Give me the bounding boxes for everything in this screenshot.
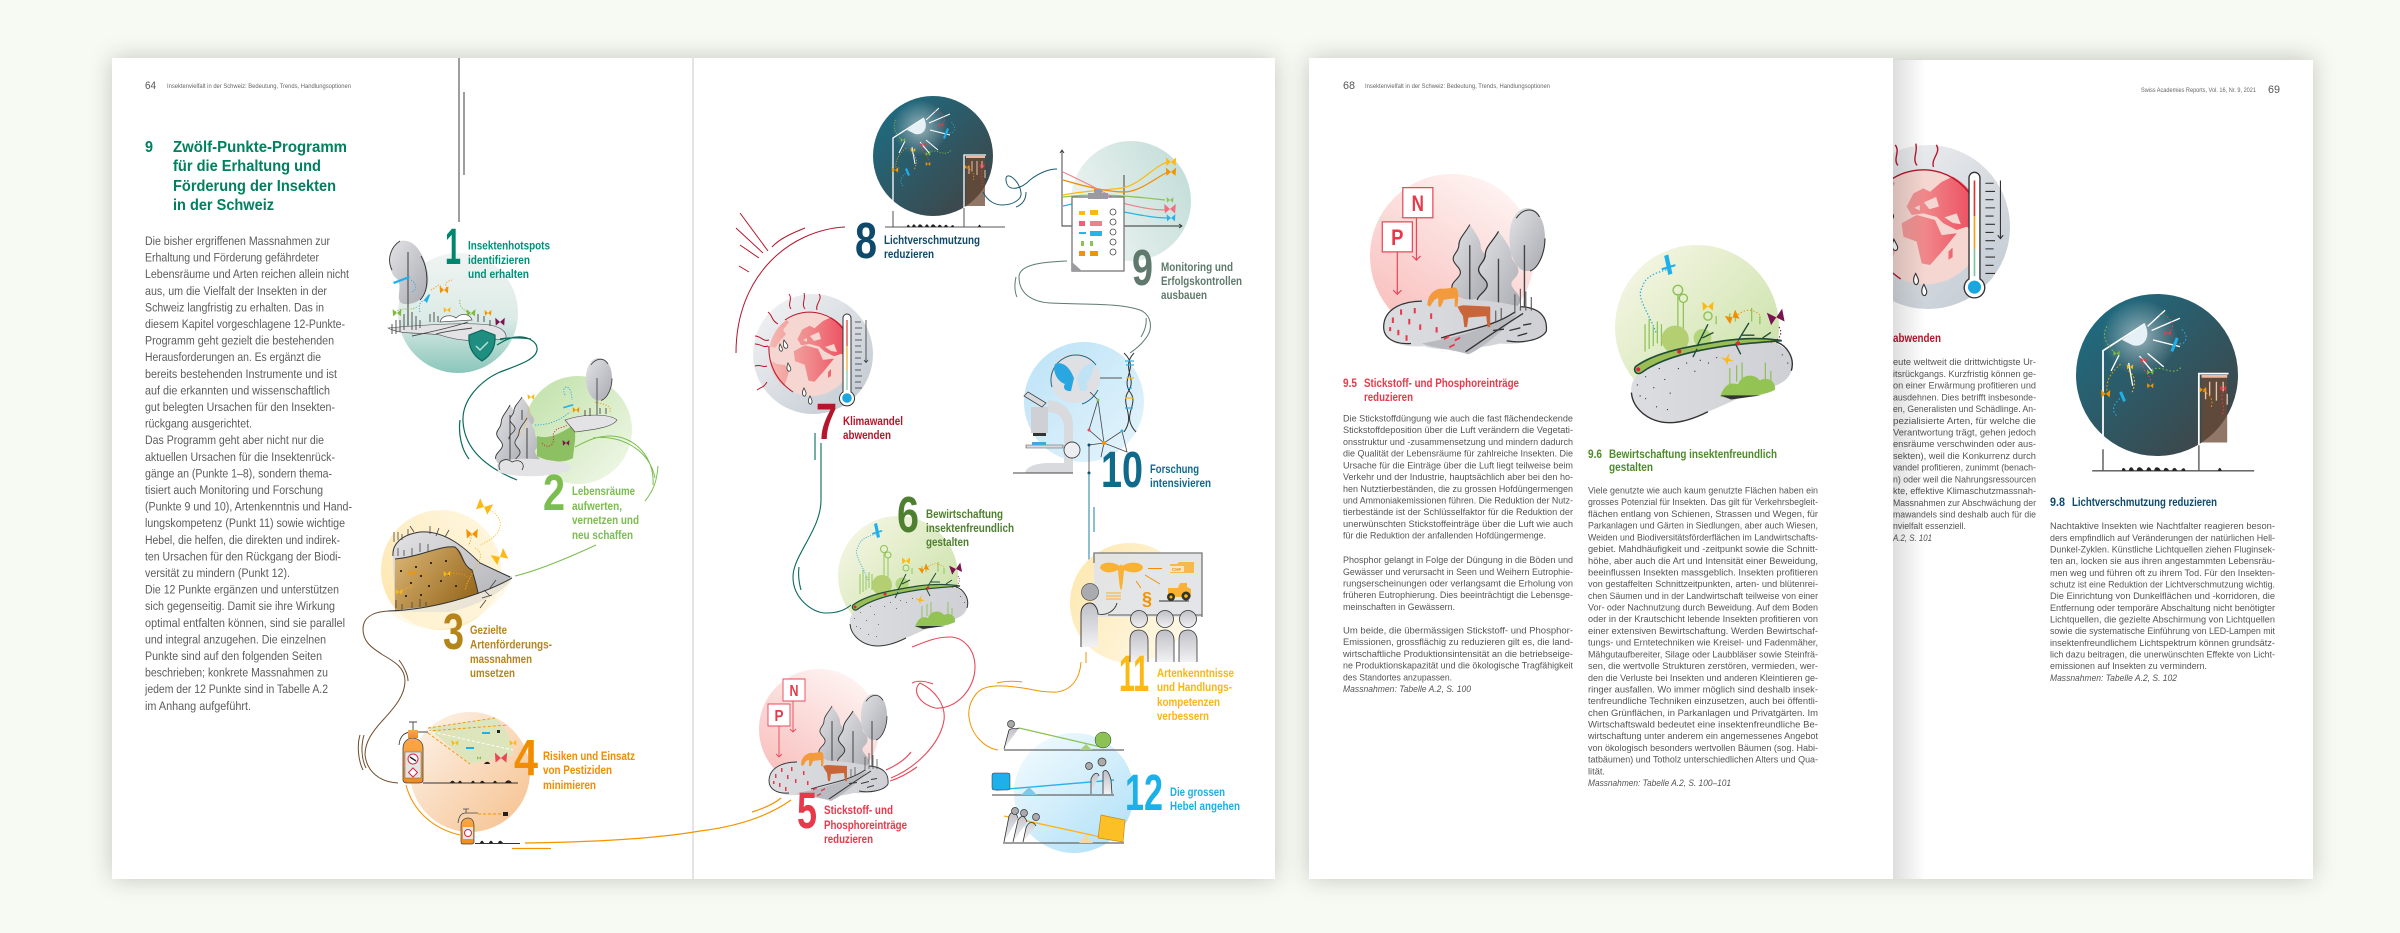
label 6: gestalten — [926, 537, 969, 549]
text block: climate change: Verantwortung trägt, gehen jedoch — [1893, 428, 2036, 438]
illustration 5: nutrient inputs — [759, 669, 888, 801]
text block: nutrient inputs: unerwünschten Stickstoffeinträge über die Luft wie auch — [1343, 519, 1573, 530]
intro text block: gut belegten Ursachen für den Insekten- — [145, 400, 335, 414]
header: page 64 — [145, 80, 351, 92]
label 8: Lichtverschmutzung — [884, 235, 980, 247]
text block: light pollution: lich dazu beitragen, die unerwünschten Effekte von Licht- — [2050, 650, 2275, 660]
chapter title: in der Schweiz — [173, 197, 274, 214]
header: page 69: 69 — [2268, 84, 2280, 96]
label 4: minimieren — [543, 780, 596, 792]
text block: climate change: Massnahmen zur Abschwächung der — [1893, 498, 2037, 509]
text block: nutrient inputs: rungserscheinungen oder verlangsamt die Erholung von — [1343, 578, 1573, 590]
label 5: Phosphoreinträge — [824, 820, 907, 832]
panel: page 69 — [1846, 60, 2313, 879]
text block: nutrient inputs: ne Produktionskapazität und die ökologische Tragfähigkeit — [1343, 660, 1573, 672]
text block: light pollution: Lichtquellen, die gezielte Abschirmung von Lichtquellen — [2050, 614, 2275, 626]
label 9: Monitoring und — [1161, 262, 1233, 274]
text block: climate change: n) oder weil die Nahrungsressourcen — [1893, 474, 2036, 486]
heading 9.6: Bewirtschaftung insektenfreundlich — [1609, 449, 1777, 461]
text block: insect-friendly management: den die Verluste bei Insekten und anderen Kleintieren ge- — [1588, 673, 1818, 684]
illustration 3: species promotion — [381, 498, 512, 630]
illustration 7 large: climate change — [1846, 144, 2010, 309]
text block: nutrient inputs: des Standortes anzupassen. — [1343, 672, 1452, 684]
label 7: 7 — [816, 393, 837, 450]
heading 9.8: 9.8 — [2050, 497, 2066, 509]
icon: butterfly — [1054, 363, 1074, 391]
heading 9.5: 9.5 — [1343, 378, 1358, 390]
text block: nutrient inputs: früheren Eutrophierung. Dies beeinträchtigt die Lebensge- — [1343, 590, 1573, 601]
connector 9 to 10 — [1015, 261, 1150, 353]
label 11: und Handlungs- — [1157, 682, 1232, 694]
connector 7 to 8 — [736, 213, 845, 353]
text block: climate change: en, Generalisten und Schädlinge. An- — [1893, 404, 2036, 415]
label 9 — [1132, 239, 1242, 302]
connector 8 to 9 — [983, 169, 1057, 207]
header: page 69 — [2141, 84, 2280, 96]
text block: light pollution — [2050, 521, 2276, 684]
text block: insect-friendly management: flächen entlang von Schienen, Strassen und Wegen, für — [1588, 509, 1819, 520]
icon: small sprayer — [458, 809, 478, 844]
text block: climate change: kte, effektive Klimaschutzmassnah- — [1893, 486, 2036, 497]
intro text block: aktuellen Ursachen für die Insektenrück- — [145, 450, 335, 464]
label 4: von Pestiziden — [543, 765, 612, 777]
label 9: Erfolgskontrollen — [1161, 276, 1242, 288]
illustration 5 large: nutrient inputs — [1370, 174, 1546, 354]
text block: nutrient inputs: tierbestände ist der Schlüsselfaktor für die Reduktion der — [1343, 507, 1574, 518]
text block: insect-friendly management: ringer ausfallen. Wo immer möglich sind deshalb insek- — [1588, 684, 1818, 696]
illustration 11: species knowledge: § — [1142, 589, 1152, 609]
label 12: Hebel angehen — [1170, 801, 1240, 813]
label 2: 2 — [543, 464, 565, 521]
label 4: 4 — [514, 729, 539, 786]
intro text block: Programm geht gezielt die bestehenden — [145, 334, 334, 348]
illustration 11: species knowledge: CHF — [1172, 567, 1181, 572]
text block: climate change — [1892, 357, 2037, 544]
illustration 8: light pollution — [873, 96, 1005, 227]
icon: DNA helix — [1124, 353, 1136, 432]
header: page 68: 68 — [1343, 80, 1355, 92]
label 2: vernetzen und — [572, 515, 639, 527]
label 5 — [797, 782, 907, 846]
connector 11 to 12 — [969, 652, 1086, 750]
connector 6 to 7 — [793, 433, 851, 613]
text block: light pollution: insektenfreundlichem Lichtspektrum können grundsätz- — [2050, 638, 2275, 649]
intro text block: und integral anzugehen. Die einzelnen — [145, 632, 326, 646]
text block: nutrient inputs: meinschaften in Gewässern. — [1343, 602, 1455, 613]
text block: insect-friendly management: tenfreundliche Techniken einzusetzen, auch bei öffentli- — [1588, 696, 1818, 707]
audience — [1130, 610, 1197, 662]
label 1: identifizieren — [468, 255, 530, 267]
text block: nutrient inputs: hen Nutztierbeständen, die zu grossen Hofdüngermengen — [1343, 484, 1573, 495]
text block: insect-friendly management: von gestaffelten Schnittzeitpunkten, arten- und blütenrei- — [1588, 579, 1818, 590]
intro text block: sich gegenseitig. Damit sie ihre Wirkung — [145, 599, 335, 613]
illustration 12: big levers — [992, 720, 1134, 853]
label 10: Forschung — [1150, 464, 1199, 476]
chapter title: 9 — [145, 139, 153, 156]
header: page 64: 64 — [145, 80, 156, 92]
label 12 — [1125, 764, 1240, 821]
label 12: Die grossen — [1170, 787, 1225, 799]
icon: shield — [469, 330, 495, 361]
chapter title: für die Erhaltung und — [173, 158, 321, 175]
connector 4 to 5 — [512, 798, 791, 848]
lever 2 — [992, 758, 1114, 795]
panel: spread pages 64-65 — [112, 58, 1275, 879]
text block: light pollution: emissionen auf Insekten zu vermindern. — [2050, 661, 2207, 672]
presenter — [1081, 584, 1121, 647]
illustration 4: pesticides — [399, 712, 530, 844]
intro text block: rückgang ausgerichtet. — [145, 417, 252, 431]
label 4: Risiken und Einsatz — [543, 751, 635, 763]
heading 9.5: Stickstoff- und Phosphoreinträge — [1364, 378, 1519, 390]
text block: insect-friendly management: lität. — [1588, 766, 1605, 778]
label 11: Artenkenntnisse — [1157, 668, 1234, 680]
intro text block: lungskompetenz (Punkt 11) sowie wichtige — [145, 516, 345, 530]
label 11: verbessern — [1157, 711, 1209, 723]
label 3: Artenförderungs- — [470, 640, 552, 652]
text block: insect-friendly management: Weiden und Biodiversitätsförderflächen im Landwirtschafts- — [1588, 532, 1818, 544]
illustration 6 large: insect-friendly management — [1615, 245, 1792, 423]
label 1: 1 — [445, 218, 461, 275]
heading 9.5: reduzieren — [1364, 392, 1413, 404]
text block: insect-friendly management: oder in der Krautschicht lebende Insekten profitieren von — [1588, 614, 1818, 625]
vertical start lines — [459, 58, 464, 222]
text block: nutrient inputs: Massnahmen: Tabelle A.2, S. 100 — [1343, 684, 1472, 695]
label 10 — [1101, 441, 1211, 498]
illustration 2: habitats — [496, 358, 632, 484]
intro text block: im Anhang aufgeführt. — [145, 699, 251, 713]
label 10: 10 — [1101, 441, 1143, 498]
text block: insect-friendly management: Viele genutzte wie auch kaum genutzte Flächen haben ein — [1588, 486, 1818, 496]
intro text block: ten Ursachen für den Rückgang der Biodi- — [145, 549, 341, 563]
text block: insect-friendly management: einer extensiven Bewirtschaftung. Werden Bewirtschaf- — [1588, 626, 1818, 637]
intro text block: Lebensräume und Arten reichen allein nicht — [145, 267, 349, 281]
label 2 — [543, 464, 639, 542]
connector 1 to 2 — [459, 337, 537, 480]
text block: insect-friendly management: Wirtschaftswald bedeutet eine insektenfreundliche Be- — [1588, 720, 1818, 730]
text block: insect-friendly management: Mähgutaufbereiter, Silage oder Laubbläser sowie Steinfrä- — [1588, 650, 1818, 660]
text block: nutrient inputs: Phosphor gelangt in Folge der Düngung in die Böden und — [1343, 555, 1573, 566]
chapter title: Zwölf-Punkte-Programm — [173, 139, 347, 156]
connector 2 to 3 — [515, 436, 658, 576]
text block: climate change: mawandels sind deshalb auch für die — [1893, 510, 2036, 520]
lever 3 — [1004, 808, 1125, 843]
intro text block: Punkte sind auf den folgenden Seiten — [145, 649, 322, 663]
label 6 — [897, 486, 1014, 549]
intro text block: Erhaltung und Förderung gefährdeter — [145, 251, 319, 265]
text block: climate change: nvielfalt essenziell. — [1893, 521, 1966, 532]
text block: insect-friendly management: tatbäumen) und Totholz unterschiedlichen Alters und Qua- — [1588, 754, 1818, 766]
label 6: Bewirtschaftung — [926, 509, 1003, 521]
label 8: reduzieren — [884, 249, 934, 261]
intro text block: Das Programm geht aber nicht nur die — [145, 433, 324, 447]
text block: insect-friendly management: sen, die wertvolle Strukturen zerstören, vermieden, wer- — [1588, 661, 1818, 672]
label 11 — [1119, 645, 1234, 723]
header: page 69: Swiss Academies Reports, Vol. 16, Nr. 9, 2021 — [2141, 87, 2256, 94]
label 1: Insektenhotspots — [468, 240, 550, 252]
label 2: neu schaffen — [572, 530, 633, 542]
label 4 — [514, 729, 635, 792]
text block: nutrient inputs: wirtschaftliche Produktionsintensität an die betriebseige- — [1342, 649, 1573, 660]
illustration 7: climate change — [753, 293, 873, 414]
label 7: abwenden — [843, 430, 891, 442]
header: page 64: Insektenvielfalt in der Schweiz: Bedeutung, Trends, Handlungsoptionen — [167, 83, 351, 90]
intro text block: (Punkte 9 und 10), Artenkenntnis und Hand- — [145, 500, 352, 514]
text block: light pollution: Die Einrichtung von Dunkelflächen und -korridoren, die — [2050, 591, 2275, 602]
intro text block: Hebel, die helfen, die direkten und indirek- — [145, 533, 340, 547]
text block: insect-friendly management: Parkanlagen und Gärten in Siedlungen, aber auch Wiesen, — [1588, 520, 1818, 532]
label 3: massnahmen — [470, 654, 532, 666]
text block: light pollution: ten an, locken sie aus ihren angestammten Lebensräu- — [2050, 556, 2275, 567]
label 1: und erhalten — [468, 269, 529, 281]
header: page 68: Insektenvielfalt in der Schweiz: Bedeutung, Trends, Handlungsoptionen — [1365, 83, 1550, 90]
heading 9.6: gestalten — [1609, 462, 1653, 474]
text block: climate change: A.2, S. 101 — [1892, 533, 1932, 544]
icon: clipboard — [1072, 189, 1124, 271]
label 3: umsetzen — [470, 668, 515, 680]
text block: climate change: vandel profitieren, zunimmt (benach- — [1893, 462, 2036, 474]
label 5: reduzieren — [824, 834, 873, 846]
text block: light pollution: sowie die systematische Einführung von LED-Lampen mit — [2050, 626, 2275, 637]
text block: insect-friendly management: höhe, aber auch die Art und Intensität einer Beweidung, — [1588, 556, 1818, 567]
text block: nutrient inputs: Gewässer und verursacht in Seen und Weihern Eutrophie- — [1343, 567, 1573, 578]
intro text block: beschrieben; konkrete Massnahmen zu — [145, 666, 328, 680]
text block: insect-friendly management: wirtschaftung unter anderem ein angemessenes Angebot — [1587, 731, 1818, 742]
intro text block — [144, 234, 352, 713]
network diagram — [1089, 392, 1127, 473]
intro text block: Die bisher ergriffenen Massnahmen zur — [145, 234, 330, 248]
chapter title: Förderung der Insekten — [173, 178, 336, 195]
intro text block: jedem der 12 Punkte sind in Tabelle A.2 — [144, 682, 328, 696]
illustration 10: research — [1013, 342, 1144, 474]
text block: climate change: pezialisierte Arten, für welche die — [1893, 416, 2036, 427]
label 9: 9 — [1132, 239, 1153, 296]
intro text block: Herausforderungen an. Es ergänzt die — [145, 350, 321, 364]
label 9: ausbauen — [1161, 290, 1207, 302]
panel: page 68 — [1309, 58, 1893, 879]
illustration 8 large: light pollution — [2076, 294, 2254, 471]
intro text block: versität zu mindern (Punkt 12). — [145, 566, 290, 580]
text block: nutrient inputs: Die Stickstoffdüngung wie auch die fast flächendeckende — [1343, 414, 1573, 424]
label 8: 8 — [855, 212, 877, 269]
intro text block: optimal entfalten können, sind sie parallel — [145, 616, 345, 630]
text block: nutrient inputs: onsstruktur und -zusammensetzung und mindern dadurch — [1343, 437, 1573, 448]
connector 10 to 11 — [1089, 473, 1094, 563]
label 11: 11 — [1119, 645, 1149, 702]
text block: nutrient inputs: Ursache für die Einträge über die Luft liegt teilweise beim — [1343, 460, 1573, 472]
heading 9.7 fragment: abwenden — [1893, 333, 1941, 345]
text block: light pollution: schutz ist eine Reduktion der Lichtverschmutzung wichtig. — [2050, 580, 2275, 590]
label 12: 12 — [1125, 764, 1163, 821]
label 10: intensivieren — [1150, 478, 1211, 490]
label 6: 6 — [897, 486, 919, 543]
intro text block: tisiert auch Monitoring und Forschung — [145, 483, 323, 497]
text block: nutrient inputs: und Ammoniakemissionen führen. Die Reduktion der Nutz- — [1343, 496, 1573, 506]
intro text block: bereits bestehenden Instrumente und ist — [145, 367, 337, 381]
text block: insect-friendly management — [1587, 486, 1819, 789]
text block: nutrient inputs: Stickstoffdeposition über die Luft verändern die Vegetati- — [1343, 425, 1573, 436]
text block: light pollution: Nachtaktive Insekten wie Nachtfalter reagieren beson- — [2050, 521, 2275, 532]
text block: nutrient inputs: Verkehr und der Industrie, hauptsächlich aber bei den ho- — [1343, 472, 1573, 483]
text block: insect-friendly management: chen Säumen und in der Landwirtschaft teilweise von einer — [1588, 591, 1819, 602]
icon: tractor — [1159, 583, 1191, 601]
chapter title — [145, 139, 347, 214]
label 3 — [443, 603, 552, 680]
label 11: kompetenzen — [1157, 697, 1220, 709]
text block: light pollution: men weg und führen oft zu ihrem Tod. Für den Insekten- — [2050, 568, 2275, 579]
connector 3 to 4 — [358, 611, 408, 783]
label 3: Gezielte — [470, 625, 507, 637]
label 2: aufwerten, — [572, 501, 622, 513]
illustration 9: monitoring — [1060, 141, 1191, 271]
intro text block: diesem Kapitel vorgeschlagene 12-Punkte- — [145, 317, 345, 331]
icon: sprayer — [399, 722, 428, 783]
text block: climate change: on einer Erwärmung profitieren und — [1893, 380, 2036, 392]
text block: insect-friendly management: von ökologisch besonders wertvollen Bäumen (sog. Habi- — [1588, 743, 1818, 754]
text block: light pollution: ders empfindlich auf Veränderungen der natürlichen Hell- — [2050, 533, 2275, 544]
text block: insect-friendly management: chen Grünflächen, in Parkanlagen und Privatgärten. Im — [1588, 708, 1818, 719]
label 5: 5 — [797, 782, 817, 839]
connector 5 to 6 — [886, 637, 975, 781]
intro text block: Die 12 Punkte ergänzen und unterstützen — [145, 583, 339, 597]
text block: nutrient inputs: die Qualität der Lebensräume für zahlreiche Insekten. Die — [1343, 448, 1573, 460]
text block: climate change: ausdehnen. Dies betrifft insbesonde- — [1893, 392, 2036, 404]
illustration 6: insect-friendly management — [838, 516, 968, 646]
icon: microscope — [1013, 392, 1080, 473]
text block: light pollution: Massnahmen: Tabelle A.2, S. 102 — [2050, 673, 2178, 684]
illustration 11: species knowledge — [1070, 543, 1202, 663]
icon: CHF box — [1170, 562, 1194, 573]
intro text block: aus, um die Vielfalt der Insekten in der — [145, 284, 327, 298]
text block: climate change: sekten), weil die Konkurrenz durch — [1893, 451, 2036, 462]
text block: light pollution: Entfernung oder temporäre Abschaltung nicht benötigter — [2050, 603, 2276, 614]
text block: climate change: eute weltweit die drittwichtigste Ur- — [1893, 357, 2036, 368]
text block: nutrient inputs — [1342, 414, 1574, 695]
text block: nutrient inputs: Um beide, die übermässigen Stickstoff- und Phosphor- — [1343, 626, 1573, 636]
intro text block: auf die erkannten und wissenschaftlich — [145, 383, 330, 397]
header: page 68 — [1343, 80, 1550, 92]
text block: nutrient inputs: für die Reduktion der anfallenden Hofdüngermenge. — [1343, 530, 1546, 542]
label 3: 3 — [443, 603, 464, 660]
illustration 1: insect hotspots — [388, 241, 518, 373]
label 5: Stickstoff- und — [824, 805, 893, 817]
text block: insect-friendly management: Vor- oder Nachnutzung durch Beweidung. Auf dem Boden — [1588, 602, 1818, 614]
intro text block: gänge an (Punkte 1–8), sondern thema- — [145, 466, 332, 480]
text block: insect-friendly management: tungs- und Erntetechniken wie Kreisel- und Fadenmäher, — [1588, 638, 1818, 648]
text block: insect-friendly management: beeinflussen Insekten massgeblich. Insekten profitieren — [1588, 568, 1818, 578]
text block: insect-friendly management: gebiet. Mahdhäufigkeit und -zeitpunkt sowie die Schnitt- — [1588, 544, 1818, 555]
text block: climate change: itsrückgangs. Kurzfristig können ge- — [1893, 369, 2036, 380]
heading 9.5 — [1343, 378, 1519, 404]
label 7 — [816, 393, 903, 450]
label 6: insektenfreundlich — [926, 523, 1014, 535]
label 2: Lebensräume — [572, 486, 635, 498]
heading 9.6: 9.6 — [1588, 449, 1602, 461]
lever 1 — [1004, 720, 1111, 750]
text block: insect-friendly management: grosses Potenzial für Insekten. Das gilt für Verkehrsbegleit- — [1588, 497, 1818, 508]
text block: light pollution: Dunkel-Zyklen. Künstliche Lichtquellen ziehen Fluginsek- — [2050, 544, 2275, 556]
heading 9.8: Lichtverschmutzung reduzieren — [2072, 497, 2217, 509]
text block: nutrient inputs: Emissionen, grossflächig zu reduzieren gilt es, die land- — [1343, 637, 1573, 648]
label 7: Klimawandel — [843, 416, 903, 428]
heading 9.6 — [1588, 449, 1777, 474]
text block: climate change: ensräume verschwinden oder aus- — [1893, 439, 2036, 450]
label 1 — [445, 218, 550, 281]
icon: wasp — [1100, 563, 1143, 590]
text block: insect-friendly management: Massnahmen: Tabelle A.2, S. 100–101 — [1588, 778, 1731, 789]
label 8 — [855, 212, 980, 269]
intro text block: Schweiz langfristig zu erhalten. Das in — [145, 300, 324, 314]
